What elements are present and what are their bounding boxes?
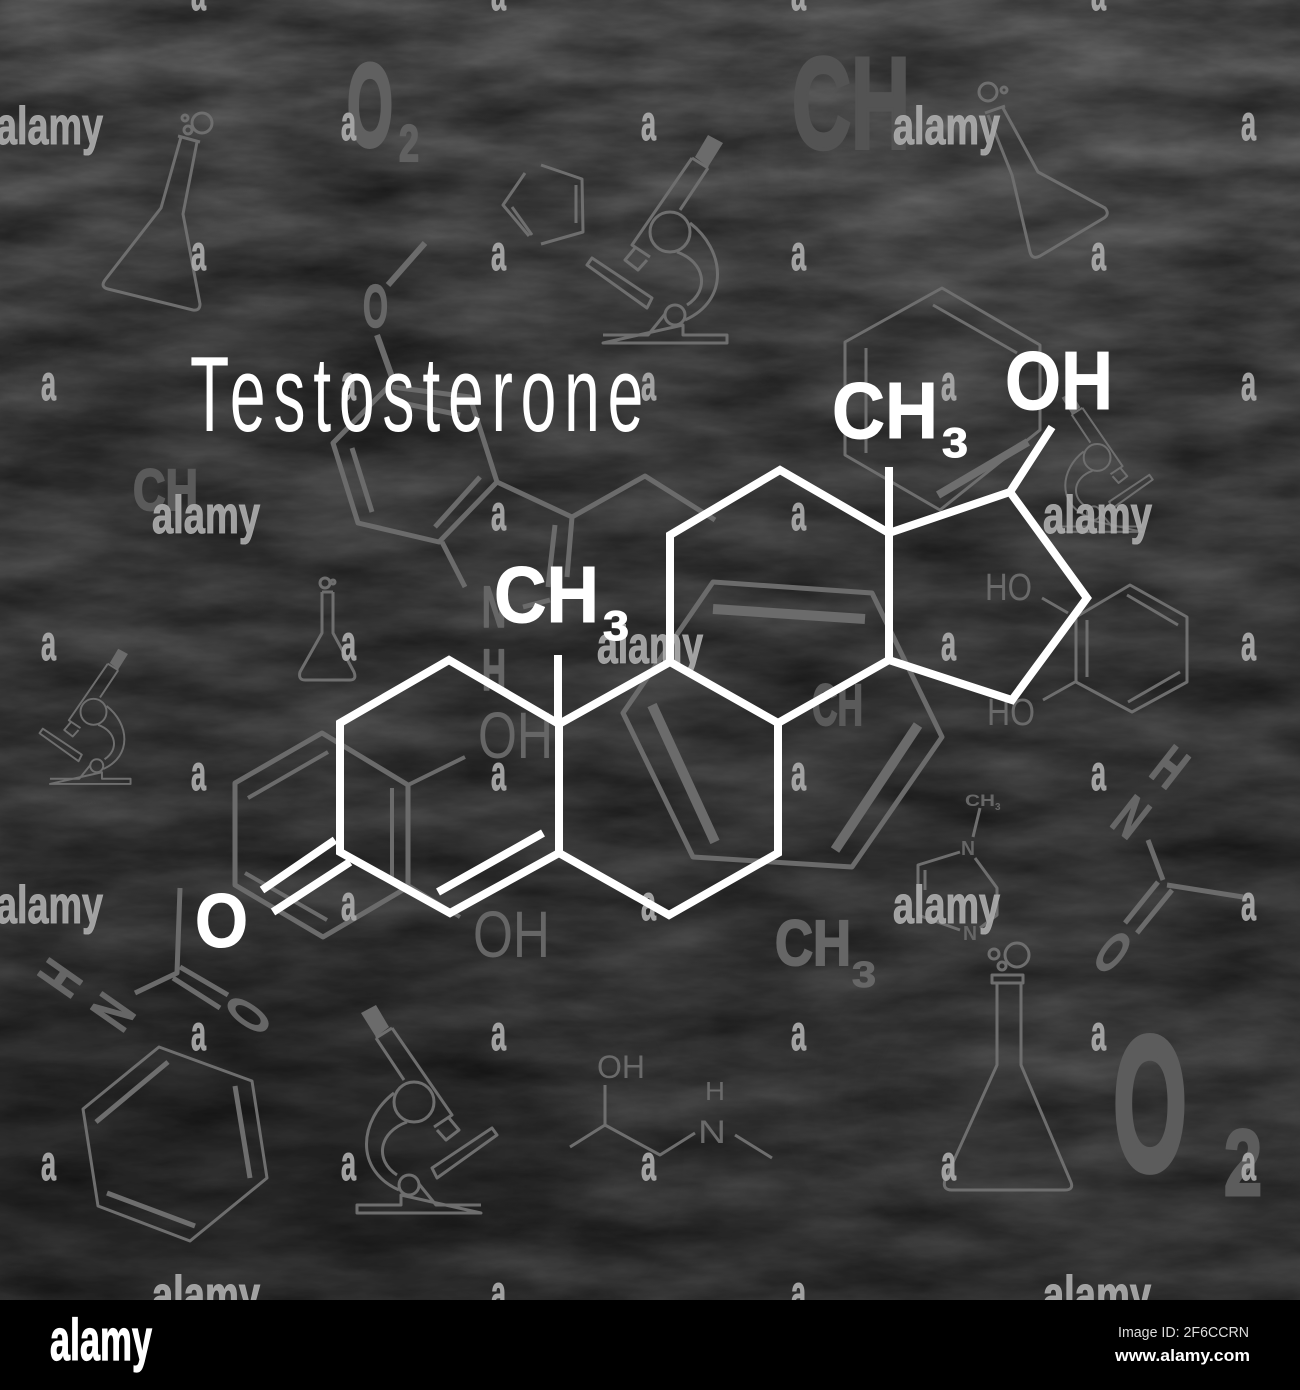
watermark words: alamy (0, 97, 103, 156)
label: O: O (195, 879, 248, 964)
rings and bonds (262, 427, 1087, 915)
watermark single letters: a (641, 875, 657, 931)
faint CH top: CH (792, 30, 910, 176)
faint microscope bottom (357, 1005, 497, 1213)
faint imidazole molecule: N (961, 838, 975, 860)
faint imidazole molecule: CH (965, 791, 995, 810)
faint O2 bottom right: O (1113, 996, 1187, 1211)
faint amide molecule right: H (1139, 734, 1200, 801)
faint molecule behind title: N (482, 575, 506, 640)
watermark single letters: a (941, 1135, 957, 1191)
watermark single letters: a (941, 615, 957, 671)
watermark words: alamy (1043, 1266, 1151, 1325)
watermark single letters: a (641, 1135, 657, 1191)
label: CH3 upper: 3 (942, 419, 968, 466)
watermark words: alamy (1043, 486, 1152, 545)
watermark single letters: a (791, 225, 807, 281)
faint molecule behind title: H (482, 638, 506, 703)
watermark words (0, 97, 1152, 1325)
watermark single letters: a (341, 875, 357, 931)
watermark words: alamy (893, 876, 1000, 935)
watermark single letters: a (191, 1005, 207, 1061)
label: CH3 lower: 3 (603, 602, 629, 649)
faint amide molecule right: O (1083, 919, 1143, 986)
faint O2 bottom right: 2 (1224, 1110, 1262, 1215)
faint phenol molecule behind ring A (235, 698, 553, 971)
watermark words: alamy (152, 486, 260, 545)
faint diol hexagon right (985, 567, 1187, 734)
faint phenol molecule behind ring A: OH (478, 698, 553, 772)
watermark single letters: a (791, 745, 807, 801)
watermark single letters: a (1241, 95, 1257, 151)
faint amide molecule left: H (26, 948, 94, 1007)
faint microscope top (587, 135, 727, 343)
watermark single letters: a (341, 95, 357, 151)
watermark single letters: a (791, 485, 807, 541)
faint amine molecule bottom: N (698, 1114, 726, 1150)
faint CH3 bottom centre: CH (775, 907, 851, 979)
faint diol hexagon right: HO (985, 567, 1032, 609)
faint amide molecule right (1083, 734, 1243, 986)
watermark single letters: a (1091, 225, 1107, 281)
watermark single letters: a (41, 1135, 57, 1191)
faint flask top left (103, 113, 212, 310)
watermark single letters: a (491, 1005, 507, 1061)
faint flask bottom right (944, 943, 1072, 1190)
faint heptagon centre (623, 582, 942, 867)
watermark single letters: a (41, 355, 57, 411)
faint molecule behind title (333, 243, 715, 703)
watermark single letters: a (491, 485, 507, 541)
faint diol hexagon right: HO (987, 692, 1035, 734)
faint amine molecule bottom (570, 1049, 772, 1158)
label: OH: OH (1005, 334, 1113, 427)
watermark single letters: a (1241, 1135, 1257, 1191)
watermark single letters: a (1091, 1005, 1107, 1061)
watermark single letters: a (341, 355, 357, 411)
watermark single letters: a (641, 95, 657, 151)
faint amine molecule bottom: OH (597, 1049, 645, 1085)
faint amide molecule left (26, 888, 284, 1045)
faint CH left: CH (133, 458, 198, 523)
watermark single letters: a (791, 1265, 807, 1321)
faint imidazole molecule (918, 791, 1001, 945)
faint microscope right (1059, 392, 1153, 532)
watermark single letters: a (491, 745, 507, 801)
watermark single letters: a (191, 745, 207, 801)
watermark words: alamy (152, 1266, 260, 1325)
watermark single letters: a (641, 355, 657, 411)
faint molecule behind title: O (363, 273, 388, 340)
watermark single letters: a (341, 615, 357, 671)
faint microscope left (40, 649, 131, 784)
faint O2 top: O (347, 40, 393, 172)
faint phenol molecule behind ring A: OH (473, 897, 550, 971)
watermark single letters: a (1241, 615, 1257, 671)
watermark single letters: a (791, 1005, 807, 1061)
watermark single letters: a (941, 355, 957, 411)
faint flask top right (979, 83, 1107, 257)
faint O2 top: 2 (399, 115, 419, 173)
faint CH3 bottom centre: 3 (852, 954, 876, 995)
faint imidazole molecule: 3 (995, 802, 1001, 813)
watermark single letters: a (341, 1135, 357, 1191)
faint amide molecule right: N (1100, 784, 1161, 851)
faint CH centre: CH (812, 673, 863, 738)
watermark single letters: a (1241, 355, 1257, 411)
website: www.alamy.com (1114, 1346, 1250, 1365)
watermark words: alamy (893, 97, 1000, 156)
watermark words: alamy (0, 876, 103, 935)
testosterone structural formula (195, 334, 1113, 964)
faint amide molecule left: N (79, 982, 147, 1041)
alamy logo: alamy (50, 1308, 152, 1373)
label: CH3 lower: CH (494, 550, 599, 639)
watermark single letters: a (191, 225, 207, 281)
bottom credit bar (0, 1300, 1300, 1390)
image id: Image ID: 2F6CCRN (1118, 1324, 1249, 1341)
faint flask small (300, 578, 355, 680)
faint cyclopentadiene ring (503, 165, 583, 244)
faint hexagon top right (845, 288, 1040, 510)
title: Testosterone (190, 334, 651, 454)
faint imidazole molecule: N (963, 923, 977, 945)
watermark single letters: a (1241, 875, 1257, 931)
watermark words: alamy (597, 616, 703, 675)
faint heptagon bottom left (83, 1047, 267, 1241)
watermark single letters: a (41, 615, 57, 671)
faint amine molecule bottom: H (705, 1076, 725, 1106)
watermark single letters: a (491, 225, 507, 281)
watermark single letters: a (491, 1265, 507, 1321)
label: CH3 upper: CH (832, 366, 938, 455)
watermark single letters: a (1091, 745, 1107, 801)
faint amide molecule left: O (212, 985, 284, 1045)
